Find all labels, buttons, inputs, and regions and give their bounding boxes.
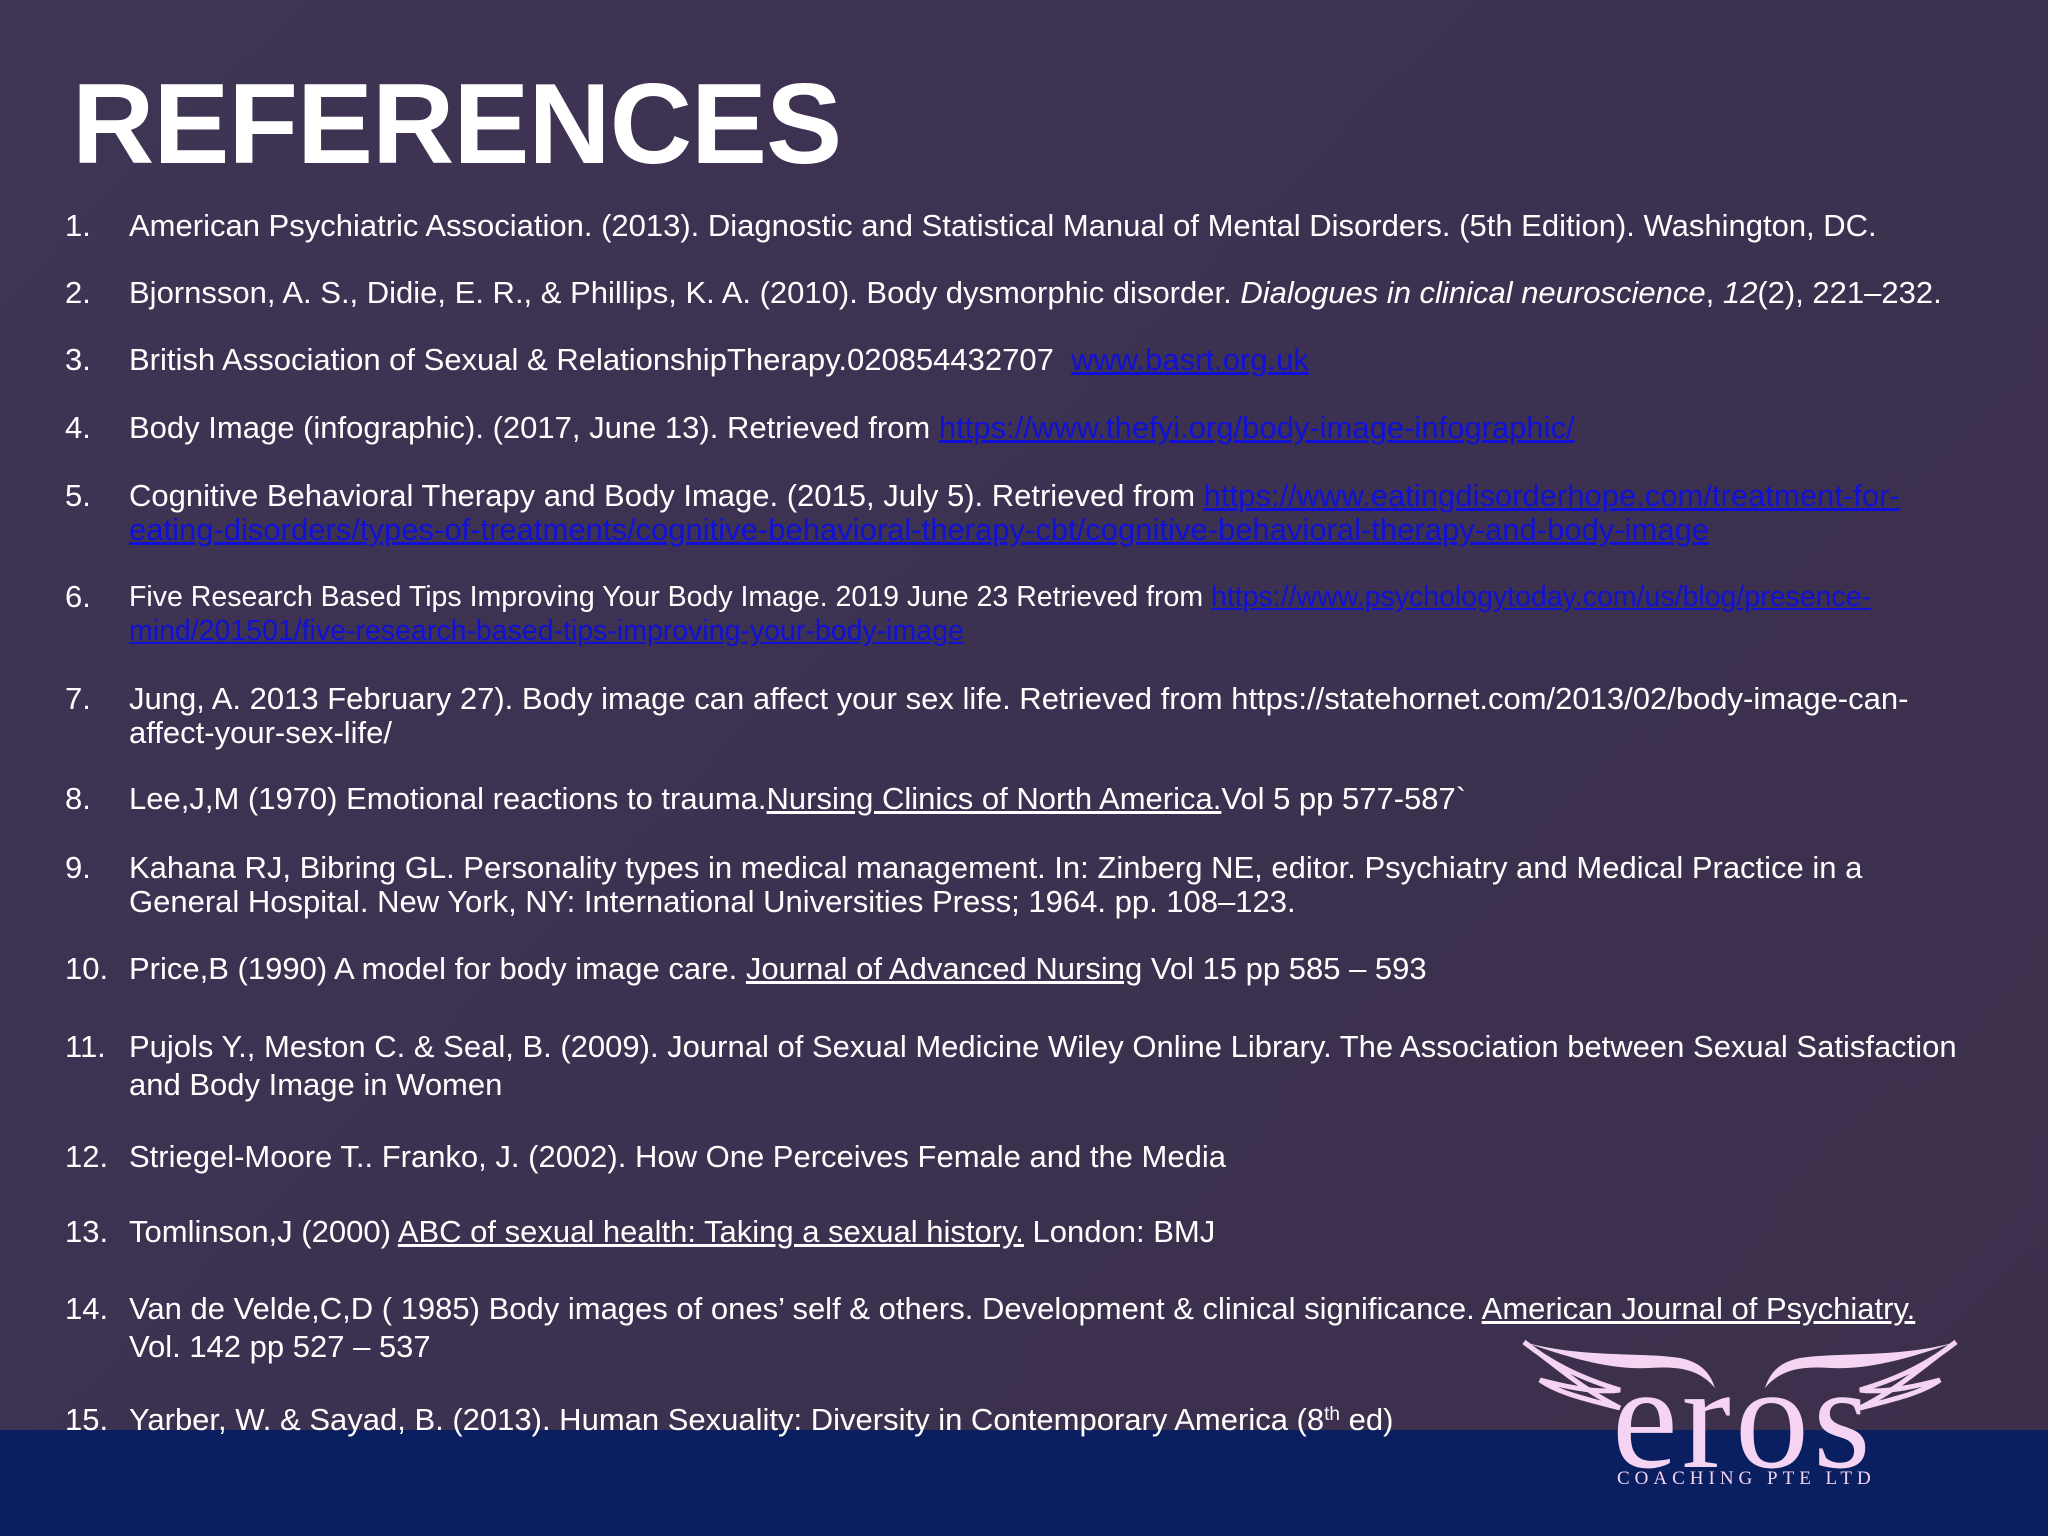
text: Vol. 142 pp 527 – 537	[129, 1329, 431, 1364]
logo: eros coaching	[1522, 1336, 1958, 1500]
text: eating-disorders/types-of-treatments/cognitive-behavioral-therapy-cbt/cognitive-behavioral-therapy-and-body-image	[129, 512, 1709, 547]
text: Cognitive Behavioral Therapy and Body Image. (2015, July 5). Retrieved from https://www.eatingdisorderhope.com/treatment-for-	[129, 478, 1900, 513]
text: 3.	[65, 342, 91, 377]
text: affect-your-sex-life/	[129, 715, 392, 750]
text: 8.	[65, 781, 91, 816]
text: 4.	[65, 410, 91, 445]
text: Striegel-Moore T.. Franko, J. (2002). How One Perceives Female and the Media	[129, 1139, 1226, 1174]
text: 7.	[65, 681, 91, 716]
text: 12.	[65, 1139, 108, 1174]
reference 13	[65, 1214, 1215, 1249]
icon: wings	[1522, 1340, 1958, 1410]
text: Van de Velde,C,D ( 1985) Body images of ones’ self & others. Development & clinical significance. American Journal of Psychiatry.	[129, 1291, 1915, 1326]
text: Body Image (infographic). (2017, June 13). Retrieved from https://www.thefyi.org/body-image-infographic/	[129, 410, 1575, 445]
text: Pujols Y., Meston C. & Seal, B. (2009). Journal of Sexual Medicine Wiley Online Library. The Association between Sexual Satisfaction	[129, 1029, 1957, 1064]
text: 5.	[65, 478, 91, 513]
text: 11.	[65, 1029, 106, 1064]
text: 9.	[65, 850, 91, 885]
reference 6	[65, 579, 1872, 647]
reference 8	[65, 781, 1466, 816]
reference 10	[65, 951, 1427, 986]
text: 14.	[65, 1291, 108, 1326]
text: Lee,J,M (1970) Emotional reactions to trauma.Nursing Clinics of North America.Vol 5 pp 577-587`	[129, 781, 1466, 816]
text: British Association of Sexual & RelationshipTherapy.020854432707 www.basrt.org.uk	[129, 342, 1309, 377]
logo wordmark: eros	[1612, 1336, 1875, 1500]
reference 1	[65, 208, 1877, 243]
text: 13.	[65, 1214, 108, 1249]
text: 2.	[65, 275, 91, 310]
reference 9	[65, 850, 1862, 919]
title: REFERENCES	[72, 61, 841, 188]
text: Kahana RJ, Bibring GL. Personality types in medical management. In: Zinberg NE, editor. Psychiatry and Medical Practice in a	[129, 850, 1862, 885]
text: 6.	[65, 579, 91, 614]
reference 4	[65, 410, 1575, 445]
reference 15	[65, 1402, 1393, 1437]
reference 7	[65, 681, 1908, 750]
reference 5	[65, 478, 1900, 547]
text: Price,B (1990) A model for body image care. Journal of Advanced Nursing Vol 15 pp 585 – 593	[129, 951, 1427, 986]
reference 3	[65, 342, 1309, 377]
text: General Hospital. New York, NY: International Universities Press; 1964. pp. 108–123.	[129, 884, 1296, 919]
text: Yarber, W. & Sayad, B. (2013). Human Sexuality: Diversity in Contemporary America (8th ed)	[129, 1402, 1393, 1437]
reference 12	[65, 1139, 1226, 1174]
text: Five Research Based Tips Improving Your Body Image. 2019 June 23 Retrieved from https://www.psychologytoday.com/us/blog/presence-	[129, 581, 1871, 613]
text: mind/201501/five-research-based-tips-improving-your-body-image	[129, 615, 964, 647]
bottom band	[0, 1430, 2048, 1536]
text: and Body Image in Women	[129, 1067, 502, 1102]
text: 10.	[65, 951, 108, 986]
text: 1.	[65, 208, 91, 243]
reference 11	[65, 1029, 1957, 1102]
text: Jung, A. 2013 February 27). Body image can affect your sex life. Retrieved from https://statehornet.com/2013/02/body-image-can-	[129, 681, 1908, 716]
text: American Psychiatric Association. (2013). Diagnostic and Statistical Manual of Mental Disorders. (5th Edition). Washington, DC.	[129, 208, 1877, 243]
reference 14	[65, 1291, 1916, 1364]
text: Bjornsson, A. S., Didie, E. R., & Phillips, K. A. (2010). Body dysmorphic disorder. Dialogues in clinical neuroscience, 12(2), 221–232.	[129, 275, 1942, 310]
text: 15.	[65, 1402, 108, 1437]
logo subtitle: COACHING PTE LTD	[1617, 1468, 1876, 1489]
reference 2	[65, 275, 1942, 310]
text: Tomlinson,J (2000) ABC of sexual health: Taking a sexual history. London: BMJ	[129, 1214, 1215, 1249]
